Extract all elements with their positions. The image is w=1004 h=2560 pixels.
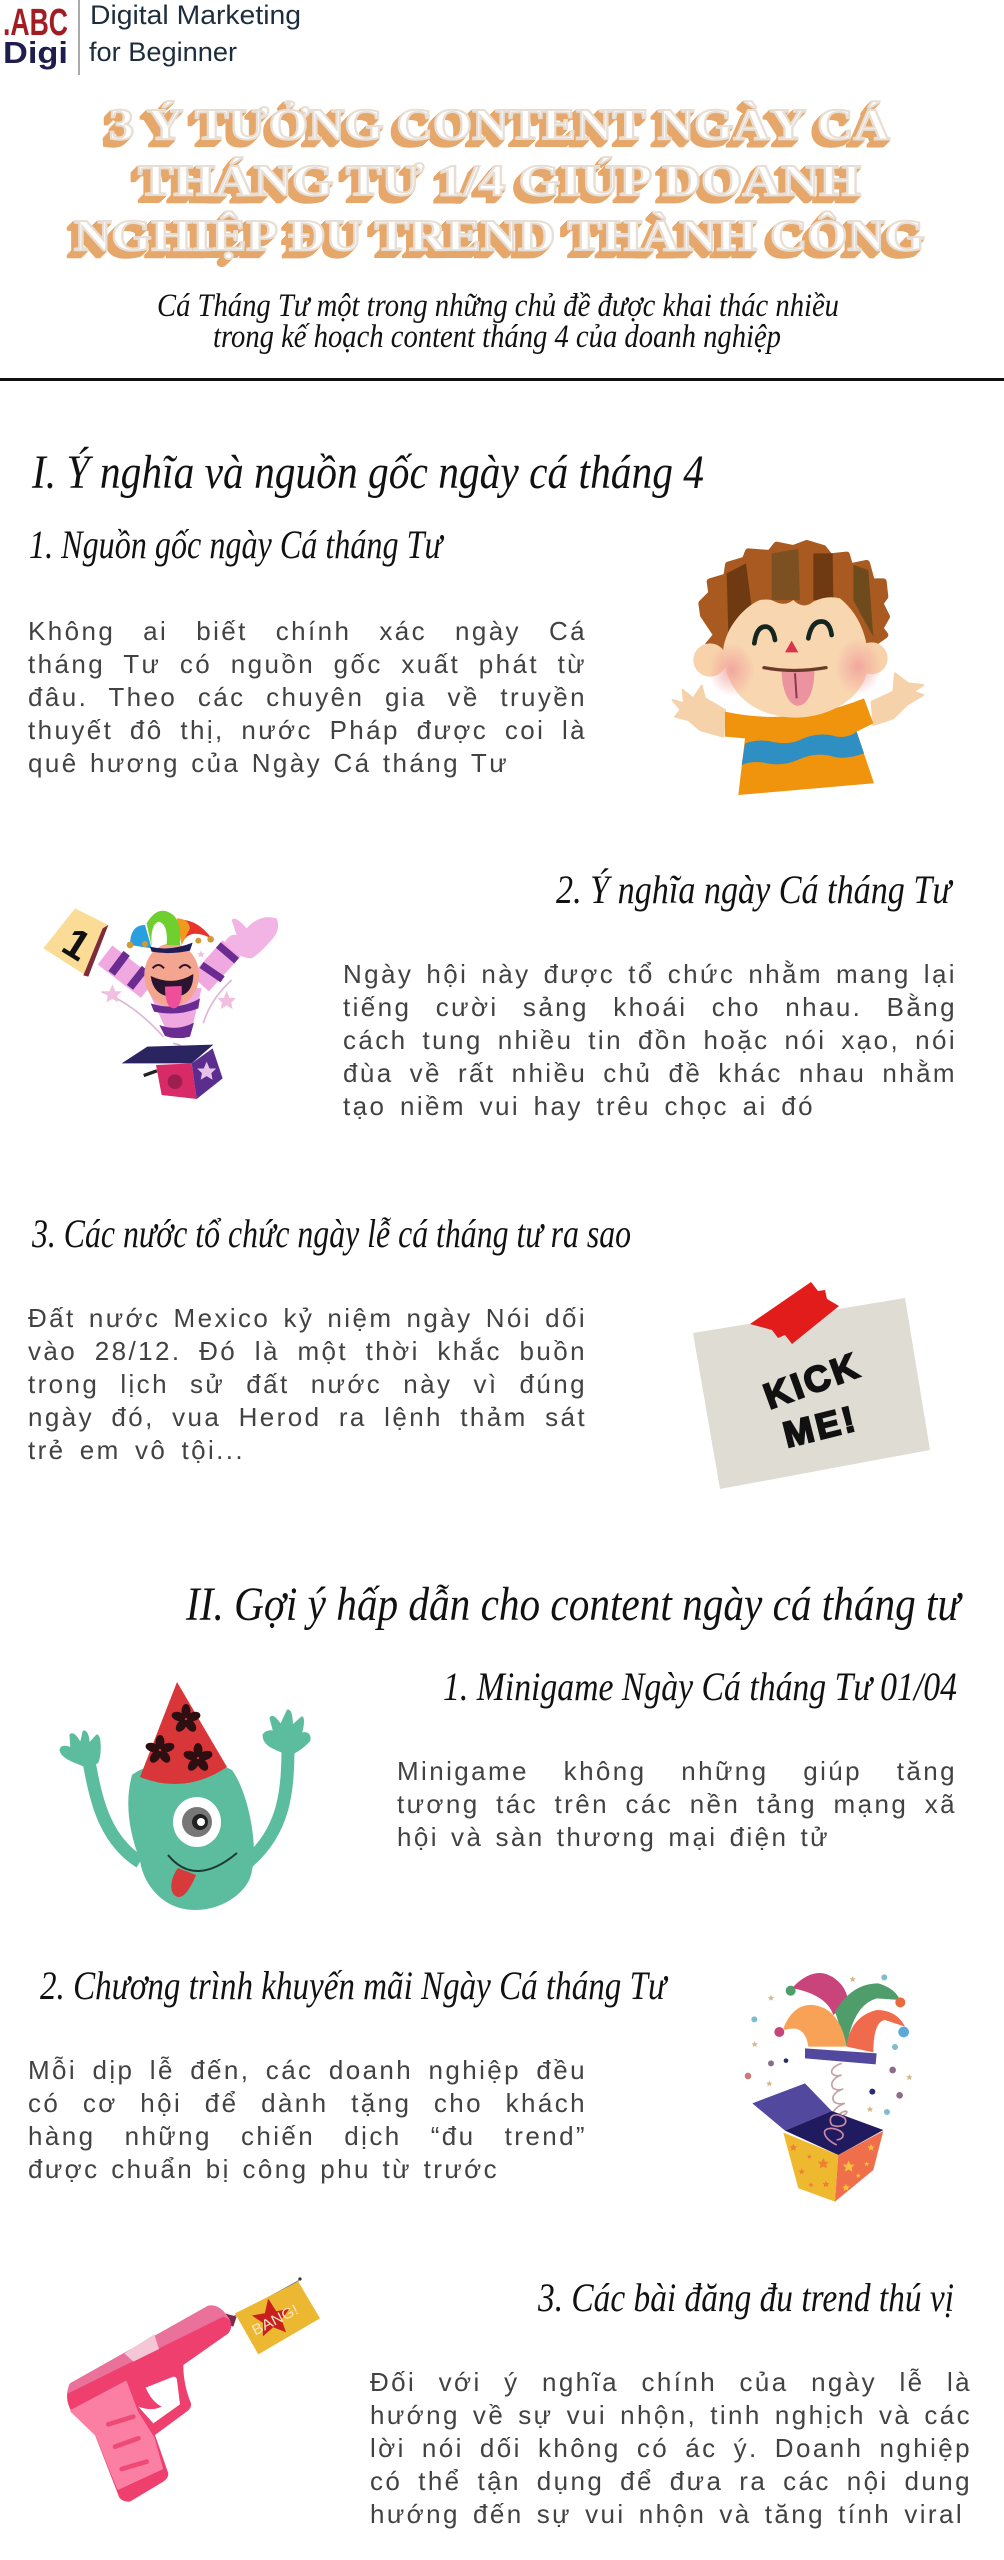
text block: I.1 body: đâu. Theo các chuyên gia về truyền [28,682,587,712]
text block: I.1 body: quê hương của Ngày Cá tháng Tư [28,748,509,778]
logo: ABC Digi [3,0,301,75]
title: 3 Ý TƯỞNG CONTENT NGÀY CÁ [109,100,890,149]
icon: boy sticking tongue out [673,543,923,795]
hat [130,925,152,948]
text block: I.3 body: Đất nước Mexico kỷ niệm ngày Nói dối [28,1303,587,1333]
icon: pink toy gun with BANG flag [67,2277,320,2502]
text block: II.2 body: Mỗi dịp lễ đến, các doanh nghiệp đều [28,2055,587,2085]
head [144,943,199,1007]
logo: ABC Digi: .ABC [3,2,68,44]
text block: II.2 body: được chuẩn bị công phu từ trước [28,2154,499,2184]
text block: II.3 body: lời nói dối không có ác ý. Doanh nghiệp [370,2433,972,2463]
icon: Kick me note: KICK [758,1344,866,1417]
text block: I.2 body: Ngày hội này được tổ chức nhằm mang lại [343,959,957,989]
text block: II.3 body [370,2367,972,2529]
text block: II.2 body [28,2055,587,2184]
text block: I.3 body: trẻ em vô tội... [28,1435,245,1465]
title: NGHIỆP ĐU TREND THÀNH CÔNG [74,211,925,260]
text block: I.3 body: ngày đó, vua Herod ra lệnh thảm sát [28,1402,587,1432]
heading: II.2: 2. Chương trình khuyến mãi Ngày Cá tháng Tư [40,1963,669,2008]
text block: II.1 body: hội và sàn thương mại điện tử [397,1822,830,1852]
heading: I.3: 3. Các nước tổ chức ngày lễ cá tháng tư ra sao [31,1211,631,1256]
logo: ABC Digi: Digi [3,35,68,70]
text block: I.3 body: vào 28/12. Đó là một thời khắc buồn [28,1336,587,1366]
logo: ABC Digi: Digital Marketing [90,0,301,30]
icon: Kick me note [693,1282,930,1489]
torso [145,983,202,1038]
text block: II.1 body [397,1756,957,1852]
icon: jester with calendar in box [43,908,278,1099]
text block: I.3 body [28,1303,587,1465]
text block: II.3 body: hướng đến sự vui nhộn và tăng tính viral [370,2499,964,2529]
icon: Kick me note: ME! [779,1397,862,1455]
left arm [105,955,148,988]
text block: II.2 body: hàng những chiến dịch “đu trend” [28,2121,587,2151]
text block: II.2 body: có cơ hội để dành tặng cho khách [28,2088,587,2118]
right arm [200,948,232,983]
box [173,1043,190,1056]
text block: I.2 body: đùa về rất nhiều chủ đề khác nhau nhằm [343,1058,957,1088]
text block: II.3 body: có thể tận dụng để đưa ra các nội dung [370,2466,972,2496]
text block: I.1 body [28,616,587,778]
text block: I.2 body: tiếng cười sảng khoái cho nhau. Bằng [343,992,957,1022]
text block: II.3 body: hướng về sự vui nhộn, tinh nghịch và các [370,2400,972,2430]
logo: ABC Digi: for Beginner [89,37,237,67]
title [74,100,925,260]
text block: I.1 body: Không ai biết chính xác ngày Cá [28,616,587,646]
icon: jack-in-the-box jester hat [745,1973,912,2202]
text block: I.2 body: cách tung nhiều tin đồn hoặc nói xạo, nói [343,1025,957,1055]
calendar [43,908,108,976]
text block: I.2 body: tạo niềm vui hay trêu chọc ai đó [343,1091,815,1121]
subtitle: trong kế hoạch content tháng 4 của doanh nghiệp [213,319,781,355]
title: THÁNG TƯ 1/4 GIÚP DOANH [138,156,861,205]
subtitle [157,288,839,355]
icon: one-eyed party monster [61,1682,309,1910]
heading: I.1: 1. Nguồn gốc ngày Cá tháng Tư [29,522,445,567]
text block: II.3 body: Đối với ý nghĩa chính của ngày lễ là [370,2367,972,2397]
text block: II.1 body: Minigame không những giúp tăng [397,1756,957,1786]
heading: section I: I. Ý nghĩa và nguồn gốc ngày cá tháng 4 [31,446,704,499]
icon: pink toy gun with BANG flag: BANG! [250,2302,301,2339]
header divider line [0,378,1004,381]
text block: II.1 body: tương tác trên các nền tảng mạng xã [397,1789,957,1819]
text block: I.3 body: trong lịch sử đất nước này vì đúng [28,1369,587,1399]
text block: I.1 body: thuyết đô thị, nước Pháp được coi là [28,715,587,745]
subtitle: Cá Tháng Tư một trong những chủ đề được khai thác nhiều [157,288,839,324]
text block: I.2 body [343,959,957,1121]
text block: I.1 body: tháng Tư có nguồn gốc xuất phát từ [28,649,587,679]
icon: jester with calendar in box: 1 [55,918,99,970]
